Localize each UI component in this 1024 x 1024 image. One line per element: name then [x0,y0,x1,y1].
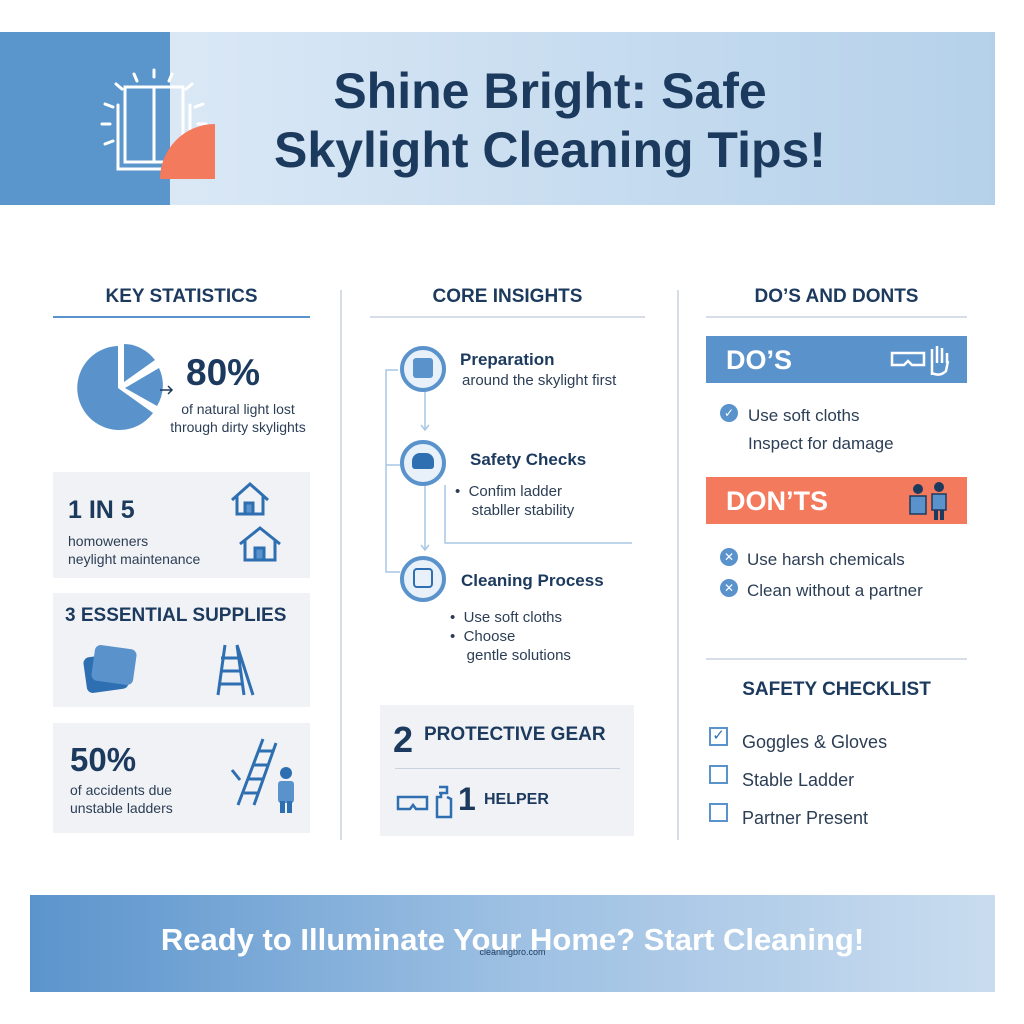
dos list [720,404,894,453]
gear box: 1 [458,781,476,817]
step: cleaning process [400,556,604,664]
donts list: ✕ [724,550,734,564]
stat box: 1 in 5 [53,472,310,578]
dos list: Use soft cloths [748,406,860,425]
gear box: 2 [393,719,413,760]
watermark: cleaningbro.com [479,947,546,957]
step: safety checks: stabller stability [472,502,574,519]
stat box: 50%: unstable ladders [70,800,173,816]
stat: 80%: through dirty skylights [170,419,306,435]
checklist [709,727,887,828]
icon: goggles and spray [396,786,452,818]
donts bar [706,477,967,524]
step: cleaning process: gentle solutions [467,647,571,664]
gear box [380,705,634,836]
icon: ladder [216,644,254,696]
stat box: supplies [53,593,310,707]
step: preparation: Preparation [460,350,554,369]
checklist: ✓ [712,727,725,744]
stat box: 50%: of accidents due [70,782,172,798]
gear box: HELPER [484,791,549,808]
donts list: Clean without a partner [747,581,923,600]
step: cleaning process: • Use soft cloths [450,609,562,626]
stat box: 1 in 5: 1 IN 5 [68,496,135,524]
stat box: 50% [53,723,310,833]
heading: key statistics: KEY STATISTICS [105,286,258,307]
step: preparation: around the skylight first [462,372,616,389]
dos bar: DO’S [726,345,792,375]
stat box: 50%: 50% [70,741,136,778]
stat box: 1 in 5: neylight maintenance [68,551,200,567]
gear box: PROTECTIVE GEAR [424,724,606,745]
donts bar: DON’TS [726,486,828,516]
call to action: Ready to Illuminate Your Home? Start Cleaning! [161,922,864,957]
icon: cloths [83,645,136,693]
panel: dos and donts [706,286,967,828]
icon: shining window [100,68,215,179]
column divider [340,290,342,840]
footer banner [30,895,995,992]
stat: 80%: of natural light lost [181,401,295,417]
panel: key statistics [53,286,310,833]
step: safety checks [400,440,586,519]
title: Shine Bright: Safe [333,63,767,119]
icon: falling ladder and person [230,738,294,813]
checklist: Partner Present [742,808,868,828]
title: Skylight Cleaning Tips! [274,122,826,178]
header left block [0,32,170,205]
step: preparation [400,346,616,392]
stat: 80%: 80% [186,352,260,393]
dos list: Inspect for damage [748,434,894,453]
dos bar [706,336,967,383]
checklist: Goggles & Gloves [742,732,887,752]
step: cleaning process: • Choose [450,628,515,645]
stat: 80% [77,344,306,435]
flow connectors [385,369,632,573]
step: safety checks: Safety Checks [470,450,586,469]
stat box: supplies: 3 ESSENTIAL SUPPLIES [65,605,286,626]
header banner [0,32,995,205]
checklist: Stable Ladder [742,770,854,790]
step: cleaning process: Cleaning Process [461,571,604,590]
icon: houses [231,482,281,562]
step: safety checks: • Confim ladder [455,483,562,500]
heading: dos and donts: DO’S AND DONTS [755,286,918,307]
donts list [720,548,923,600]
donts list: ✕ [724,581,734,595]
dos list: ✓ [724,406,734,420]
panel: core insights [370,286,645,836]
donts list: Use harsh chemicals [747,550,905,569]
stat box: 1 in 5: homoweners [68,533,148,549]
heading: core insights: CORE INSIGHTS [433,286,582,307]
heading: safety checklist: SAFETY CHECKLIST [742,679,931,700]
title [274,63,826,178]
